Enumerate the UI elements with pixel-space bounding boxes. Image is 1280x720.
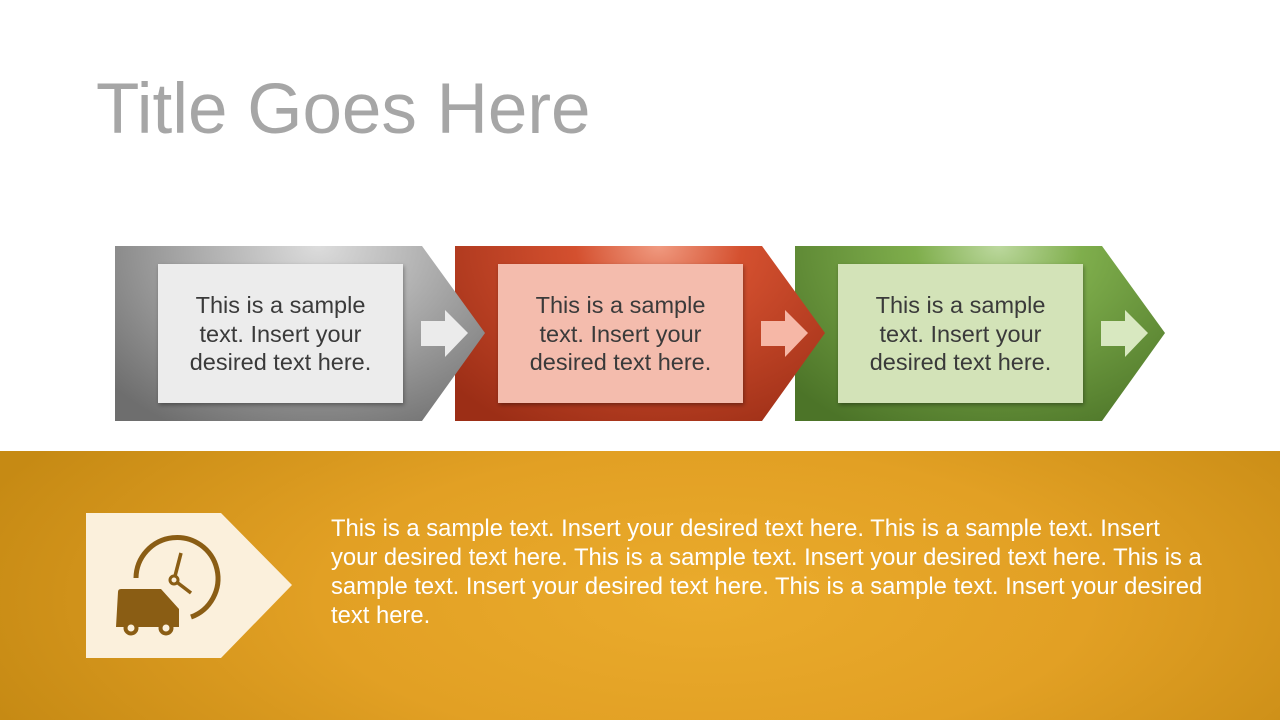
body text: This is a sample text. Insert your desired text here. This is a sample text. Insert (331, 515, 1160, 542)
bottom band (0, 451, 1280, 720)
body text (331, 515, 1202, 629)
text: step 2: desired text here. (530, 349, 711, 375)
text: step 2 (530, 292, 711, 375)
body text: sample text. Insert your desired text here. This is a sample text. Insert your desired (331, 573, 1202, 600)
chevron: red (455, 246, 825, 421)
text: step 1: text. Insert your (200, 320, 361, 346)
tag with icon (86, 513, 292, 658)
text: step 3: desired text here. (870, 349, 1051, 375)
text: step 2: text. Insert your (540, 320, 701, 346)
text: step 1: This is a sample (196, 292, 365, 318)
process chevrons (115, 246, 1165, 421)
text: step 3: This is a sample (876, 292, 1045, 318)
text: step 1 (190, 292, 371, 375)
chevron: green (795, 246, 1165, 421)
body text: text here. (331, 602, 430, 629)
text: step 3 (870, 292, 1051, 375)
text: step 1: desired text here. (190, 349, 371, 375)
icon: truck clock (116, 537, 218, 634)
text: step 2: This is a sample (536, 292, 705, 318)
body text: your desired text here. This is a sample text. Insert your desired text here. This is a (331, 544, 1202, 571)
text: step 3: text. Insert your (880, 320, 1041, 346)
chevron: gray (115, 246, 485, 421)
title: Title Goes Here (96, 70, 591, 149)
